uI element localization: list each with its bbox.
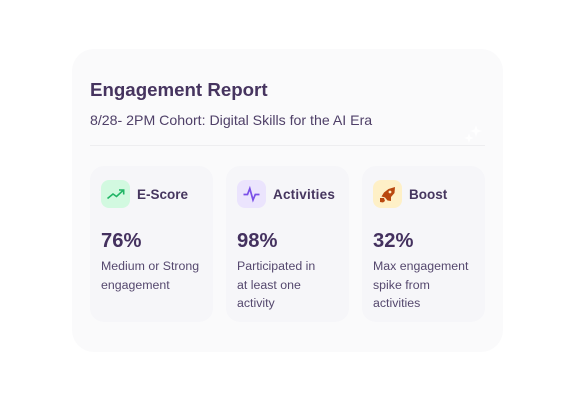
icon: rocket — [373, 180, 402, 208]
panel: E-Score — [90, 166, 213, 322]
description: Boost: Max engagement — [373, 259, 468, 273]
panel: Activities — [226, 166, 349, 322]
subtitle: 8/28- 2PM Cohort: Digital Skills for the AI Era — [90, 112, 372, 128]
panel: Boost — [362, 166, 485, 322]
description: Boost: spike from — [373, 278, 430, 292]
icon: sparkles — [462, 124, 484, 144]
value: 98%: 98% — [237, 230, 277, 252]
icon: trend up — [101, 180, 130, 208]
description: Activities: at least one — [237, 278, 301, 292]
description: E-Score: Medium or Strong — [101, 259, 199, 273]
title: Engagement Report — [90, 79, 268, 100]
description: Boost: activities — [373, 296, 420, 310]
panel: engagement report card — [72, 49, 503, 352]
label: E-Score: E-Score — [137, 187, 188, 202]
divider — [90, 145, 485, 146]
description: Activities: Participated in — [237, 259, 315, 273]
value: 32%: 32% — [373, 230, 413, 252]
description: Activities: activity — [237, 296, 275, 310]
description: E-Score: engagement — [101, 278, 170, 292]
icon: activity pulse — [237, 180, 266, 208]
label: Boost: Boost — [409, 187, 447, 202]
description: E-Score — [101, 259, 199, 292]
description: Activities — [237, 259, 315, 310]
value: 76%: 76% — [101, 230, 141, 252]
label: Activities: Activities — [273, 187, 335, 202]
description: Boost — [373, 259, 468, 310]
